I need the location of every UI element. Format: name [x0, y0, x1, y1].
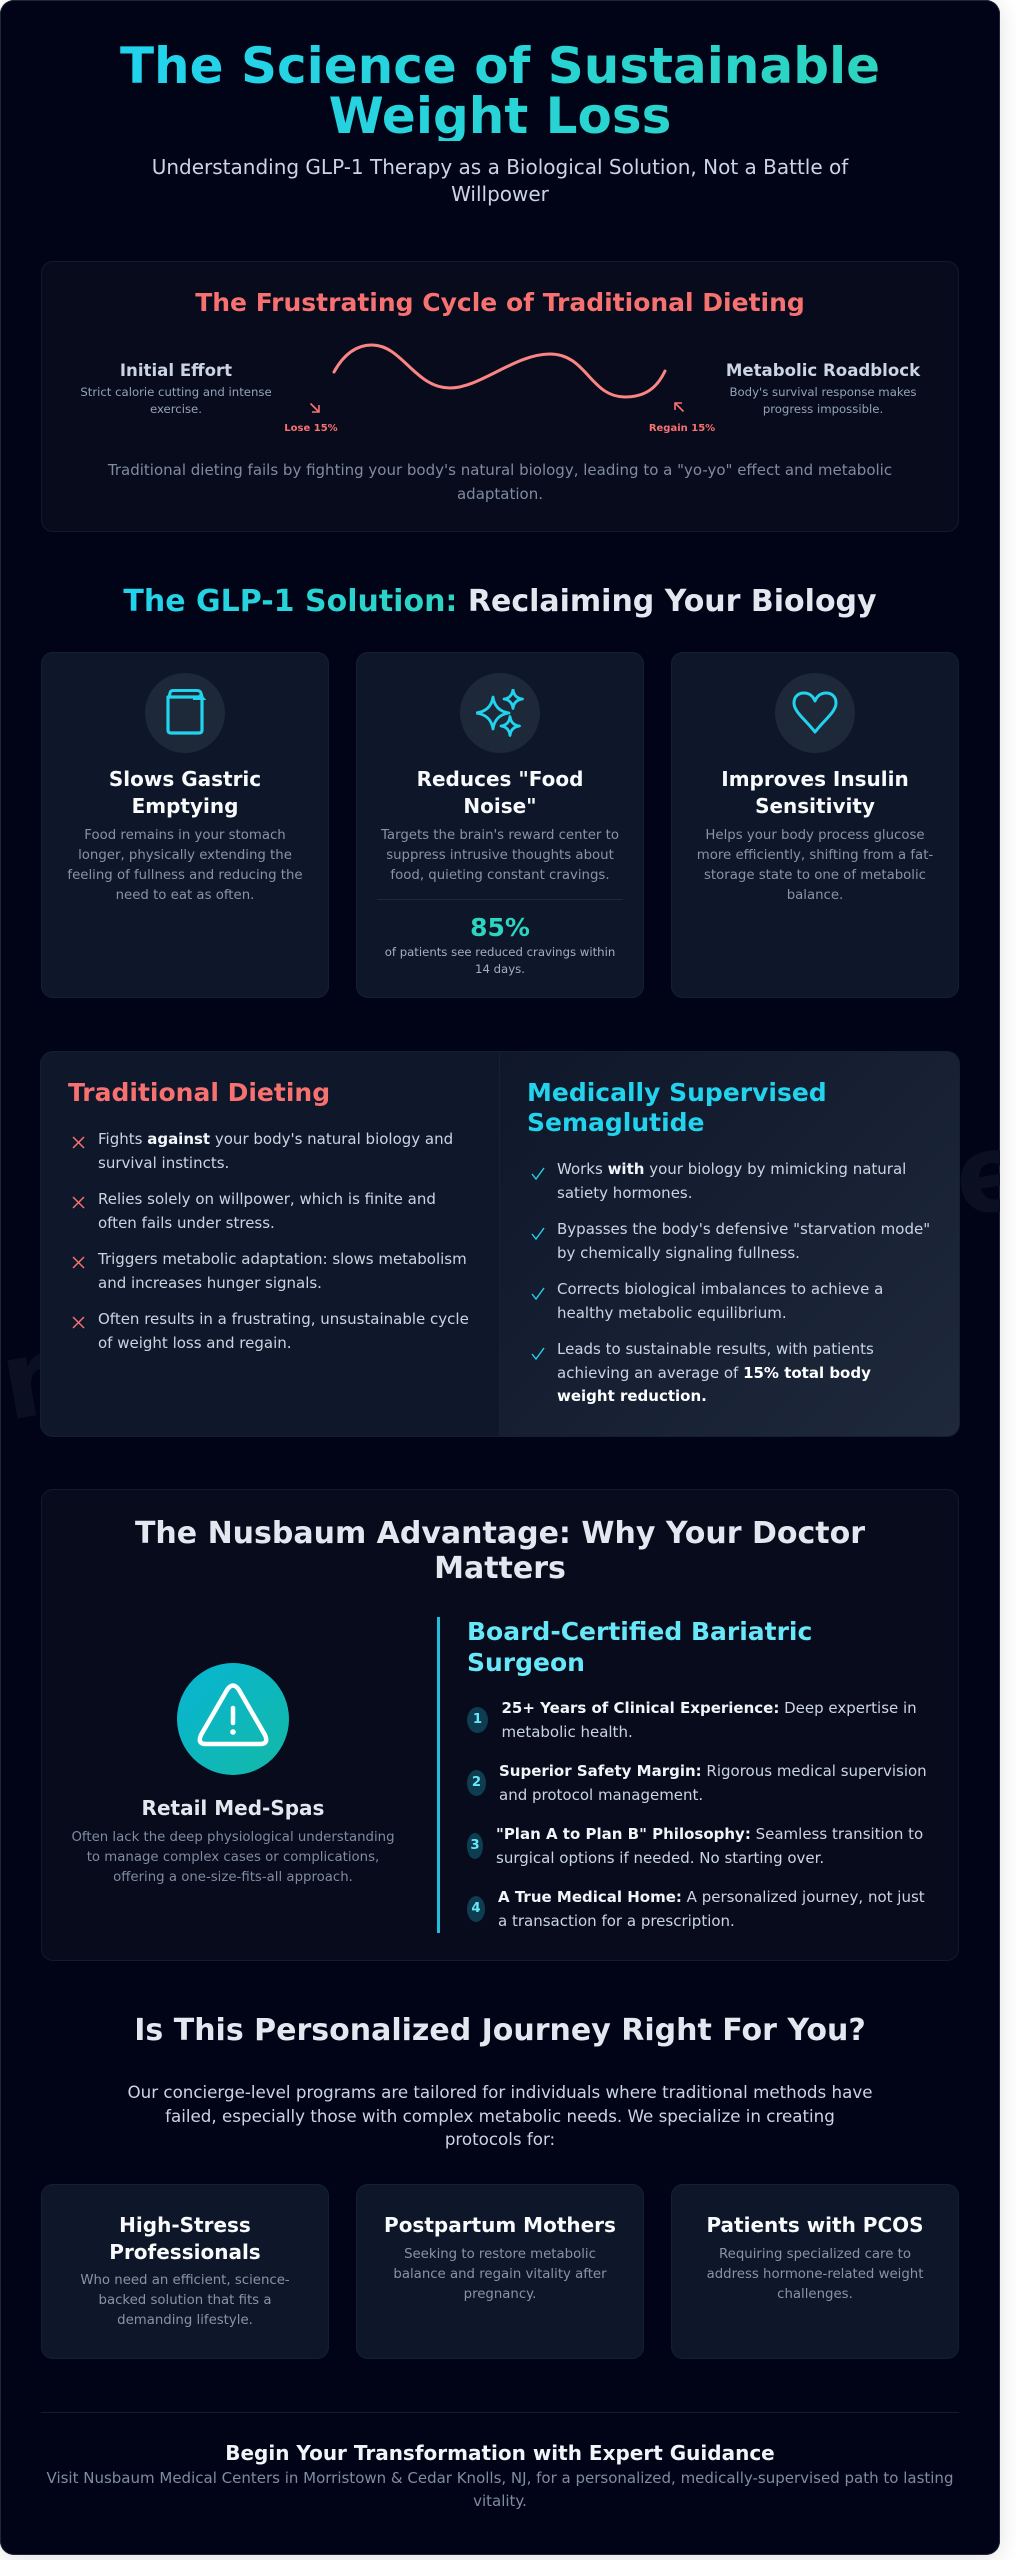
column: medically supervised background	[499, 1052, 959, 1436]
card text: more efficiently, shifting from a fat-	[697, 848, 933, 863]
down arrow	[310, 402, 320, 413]
card text: Targets the brain's reward center to	[381, 828, 619, 843]
card text: Helps your body process glucose	[705, 828, 925, 843]
advantage heading: Matters	[434, 1550, 566, 1586]
text 2: Superior Safety Margin: Rigorous medical supervision	[499, 1762, 927, 1780]
advantage heading: The Nusbaum Advantage: Why Your Doctor	[135, 1516, 865, 1551]
item 3	[557, 1280, 883, 1322]
heading: semaglutide: Semaglutide	[527, 1108, 705, 1137]
cycle heading: The Frustrating Cycle of Traditional Dieting	[195, 288, 805, 317]
retail med-spas text: to manage complex cases or complications,	[87, 1850, 379, 1865]
item 2: often fails under stress.	[98, 1214, 275, 1232]
initial effort label	[80, 361, 272, 416]
metabolic roadblock label: progress impossible.	[763, 402, 883, 416]
item 1: survival instincts.	[98, 1154, 229, 1172]
list: benefits	[532, 1160, 930, 1405]
icon: sparkles	[460, 673, 540, 753]
heading: semaglutide: Medically Supervised	[527, 1078, 827, 1107]
card title: Emptying	[132, 794, 238, 818]
item 2	[467, 1762, 927, 1804]
stat: 85%: 85%	[470, 913, 530, 942]
cross icons	[72, 1136, 84, 1328]
card text: need to eat as often.	[116, 888, 254, 903]
item 4	[467, 1888, 925, 1930]
card title	[41, 2212, 329, 2265]
footer heading: Begin Your Transformation with Expert Guidance	[225, 2441, 775, 2465]
metabolic roadblock label: Body's survival response makes	[729, 385, 916, 399]
icon: heart	[775, 673, 855, 753]
journey intro: Our concierge-level programs are tailored for individuals where traditional methods have	[128, 2082, 872, 2102]
item 1: Works with your biology by mimicking natural	[557, 1160, 906, 1178]
number 1: 1	[473, 1712, 482, 1727]
card text: feeling of fullness and reducing the	[67, 868, 303, 883]
card text: Requiring specialized care to	[719, 2247, 911, 2262]
item 2	[557, 1220, 930, 1262]
item 2: by chemically signaling fullness.	[557, 1244, 800, 1262]
card text: Who need an efficient, science-	[80, 2273, 290, 2288]
icon: warning badge	[177, 1663, 289, 1775]
card text: suppress intrusive thoughts about	[386, 848, 614, 863]
surgeon heading: Board-Certified Bariatric	[467, 1617, 812, 1646]
text 2: and protocol management.	[499, 1786, 703, 1804]
card text: balance.	[787, 888, 843, 903]
card text: challenges.	[777, 2287, 853, 2302]
footer text: vitality.	[473, 2492, 527, 2510]
list: drawbacks	[72, 1130, 469, 1352]
retail med-spas text	[71, 1830, 395, 1885]
subtitle: Understanding GLP-1 Therapy as a Biological Solution, Not a Battle of	[152, 155, 848, 179]
initial effort label: exercise.	[150, 402, 202, 416]
stat caption	[385, 945, 615, 976]
number 4: 4	[471, 1901, 481, 1916]
vertical rule	[437, 1617, 440, 1933]
surgeon heading	[467, 1617, 812, 1677]
text 1: 25+ Years of Clinical Experience: Deep expertise in	[502, 1699, 917, 1717]
metabolic roadblock label	[726, 361, 920, 416]
text 3	[496, 1825, 923, 1866]
icon: stomach container	[145, 673, 225, 753]
card title: Improves Insulin	[721, 767, 909, 791]
initial effort label: Initial Effort	[120, 361, 232, 380]
card title: Noise"	[463, 794, 537, 818]
divider	[377, 899, 623, 900]
item 2: Bypasses the body's defensive "starvation mode"	[557, 1220, 930, 1238]
card text	[356, 2245, 644, 2305]
card text: balance and regain vitality after	[393, 2267, 607, 2282]
stat caption: of patients see reduced cravings within	[385, 945, 615, 959]
item 4: weight reduction.	[557, 1387, 707, 1405]
title	[120, 37, 880, 145]
item 1: Fights against your body's natural biology and	[98, 1130, 453, 1148]
journey intro: protocols for:	[445, 2129, 555, 2149]
card text	[67, 828, 303, 903]
card: improves insulin sensitivity	[671, 652, 959, 998]
retail med-spas text: offering a one-size-fits-all approach.	[113, 1870, 353, 1885]
item 4: of weight loss and regain.	[98, 1334, 292, 1352]
text 4: A True Medical Home: A personalized journey, not just	[498, 1888, 925, 1906]
journey intro: failed, especially those with complex metabolic needs. We specialize in creating	[165, 2106, 835, 2126]
text 4: a transaction for a prescription.	[498, 1912, 735, 1930]
card text	[697, 828, 933, 903]
lose label: Lose 15%	[284, 423, 338, 434]
item 3: and increases hunger signals.	[98, 1274, 322, 1292]
number 3: 3	[470, 1838, 480, 1853]
card title: High-Stress	[119, 2213, 251, 2237]
card title: Patients with PCOS	[706, 2213, 924, 2237]
number 4	[467, 1896, 485, 1922]
card: postpartum mothers	[356, 2184, 644, 2359]
surgeon heading: Surgeon	[467, 1648, 585, 1677]
item 2	[98, 1190, 436, 1232]
panel: comparison	[41, 1052, 959, 1436]
text 2	[499, 1762, 927, 1804]
text 4	[498, 1888, 925, 1930]
check icons	[532, 1168, 544, 1360]
item 1: satiety hormones.	[557, 1184, 693, 1202]
advantage heading	[135, 1516, 865, 1586]
cycle caption	[108, 461, 892, 503]
card text: backed solution that fits a	[98, 2293, 271, 2308]
item 3: Corrects biological imbalances to achieve a	[557, 1280, 883, 1298]
cycle caption: adaptation.	[457, 485, 543, 503]
title: Weight Loss	[329, 87, 671, 145]
card text	[671, 2245, 959, 2305]
footer text	[0, 2467, 1000, 2513]
weight cycle curve	[332, 344, 666, 398]
card text: Seeking to restore metabolic	[404, 2247, 596, 2262]
cycle caption: Traditional dieting fails by fighting your body's natural biology, leading to a "yo-yo" effect and metabolic	[108, 461, 892, 479]
card text: pregnancy.	[464, 2287, 536, 2302]
item 3	[467, 1825, 923, 1866]
card text: address hormone-related weight	[707, 2267, 923, 2282]
item 4	[557, 1340, 874, 1405]
card title: Professionals	[109, 2240, 261, 2264]
item 4	[98, 1310, 469, 1352]
item 4: achieving an average of 15% total body	[557, 1364, 871, 1382]
card text: demanding lifestyle.	[117, 2313, 253, 2328]
card: high-stress professionals	[41, 2184, 329, 2359]
card title: Sensitivity	[755, 794, 875, 818]
item 4: Often results in a frustrating, unsustainable cycle	[98, 1310, 469, 1328]
number 2	[467, 1770, 486, 1796]
retail med-spas title: Retail Med-Spas	[142, 1796, 324, 1820]
panel: frustrating cycle	[41, 261, 959, 532]
metabolic roadblock label: Metabolic Roadblock	[726, 361, 920, 380]
card text	[380, 828, 619, 883]
item 1	[557, 1160, 906, 1202]
heading: traditional dieting: Traditional Dieting	[68, 1078, 330, 1107]
subtitle: Willpower	[451, 182, 549, 206]
text 3: "Plan A to Plan B" Philosophy: Seamless transition to	[496, 1825, 923, 1843]
card title	[109, 767, 261, 818]
item 3: healthy metabolic equilibrium.	[557, 1304, 787, 1322]
text 1	[502, 1699, 917, 1740]
text 3: surgical options if needed. No starting over.	[496, 1848, 824, 1866]
card: reduces food noise	[356, 652, 644, 998]
card text	[41, 2271, 329, 2331]
journey intro	[0, 2081, 1000, 2152]
title: The Science of Sustainable	[120, 37, 880, 95]
card: slows gastric emptying	[41, 652, 329, 998]
card title: Slows Gastric	[109, 767, 261, 791]
item 3	[98, 1250, 467, 1292]
card title	[721, 767, 909, 818]
card title: Reduces "Food	[417, 767, 583, 791]
item 4: Leads to sustainable results, with patients	[557, 1340, 874, 1358]
footer text: Visit Nusbaum Medical Centers in Morristown & Cedar Knolls, NJ, for a personalized, medically-supervised path to lasting	[47, 2469, 953, 2487]
card: patients with pcos	[671, 2184, 959, 2359]
journey heading: Is This Personalized Journey Right For You?	[134, 2013, 866, 2048]
regain label: Regain 15%	[649, 423, 715, 434]
retail med-spas text: Often lack the deep physiological understanding	[71, 1830, 395, 1845]
text 1: metabolic health.	[502, 1722, 633, 1740]
card title: Postpartum Mothers	[384, 2213, 616, 2237]
item 2: Relies solely on willpower, which is finite and	[98, 1190, 436, 1208]
item 3: Triggers metabolic adaptation: slows metabolism	[98, 1250, 467, 1268]
panel: nusbaum advantage	[41, 1489, 959, 1961]
item 1	[98, 1130, 453, 1172]
subtitle	[152, 155, 849, 206]
card text: food, quieting constant cravings.	[390, 868, 610, 883]
stat caption: 14 days.	[475, 962, 525, 976]
number 1	[467, 1707, 488, 1733]
heading: semaglutide	[527, 1078, 827, 1137]
number 2: 2	[472, 1775, 481, 1790]
number 3	[467, 1833, 483, 1859]
card text: Food remains in your stomach	[84, 828, 286, 843]
item 1	[467, 1699, 917, 1740]
card title	[417, 767, 583, 818]
card text: storage state to one of metabolic	[704, 868, 926, 883]
card text: longer, physically extending the	[78, 848, 292, 863]
initial effort label: Strict calorie cutting and intense	[80, 385, 272, 399]
up arrow	[674, 402, 684, 412]
solution heading: The GLP-1 Solution: Reclaiming Your Biology	[123, 584, 877, 619]
